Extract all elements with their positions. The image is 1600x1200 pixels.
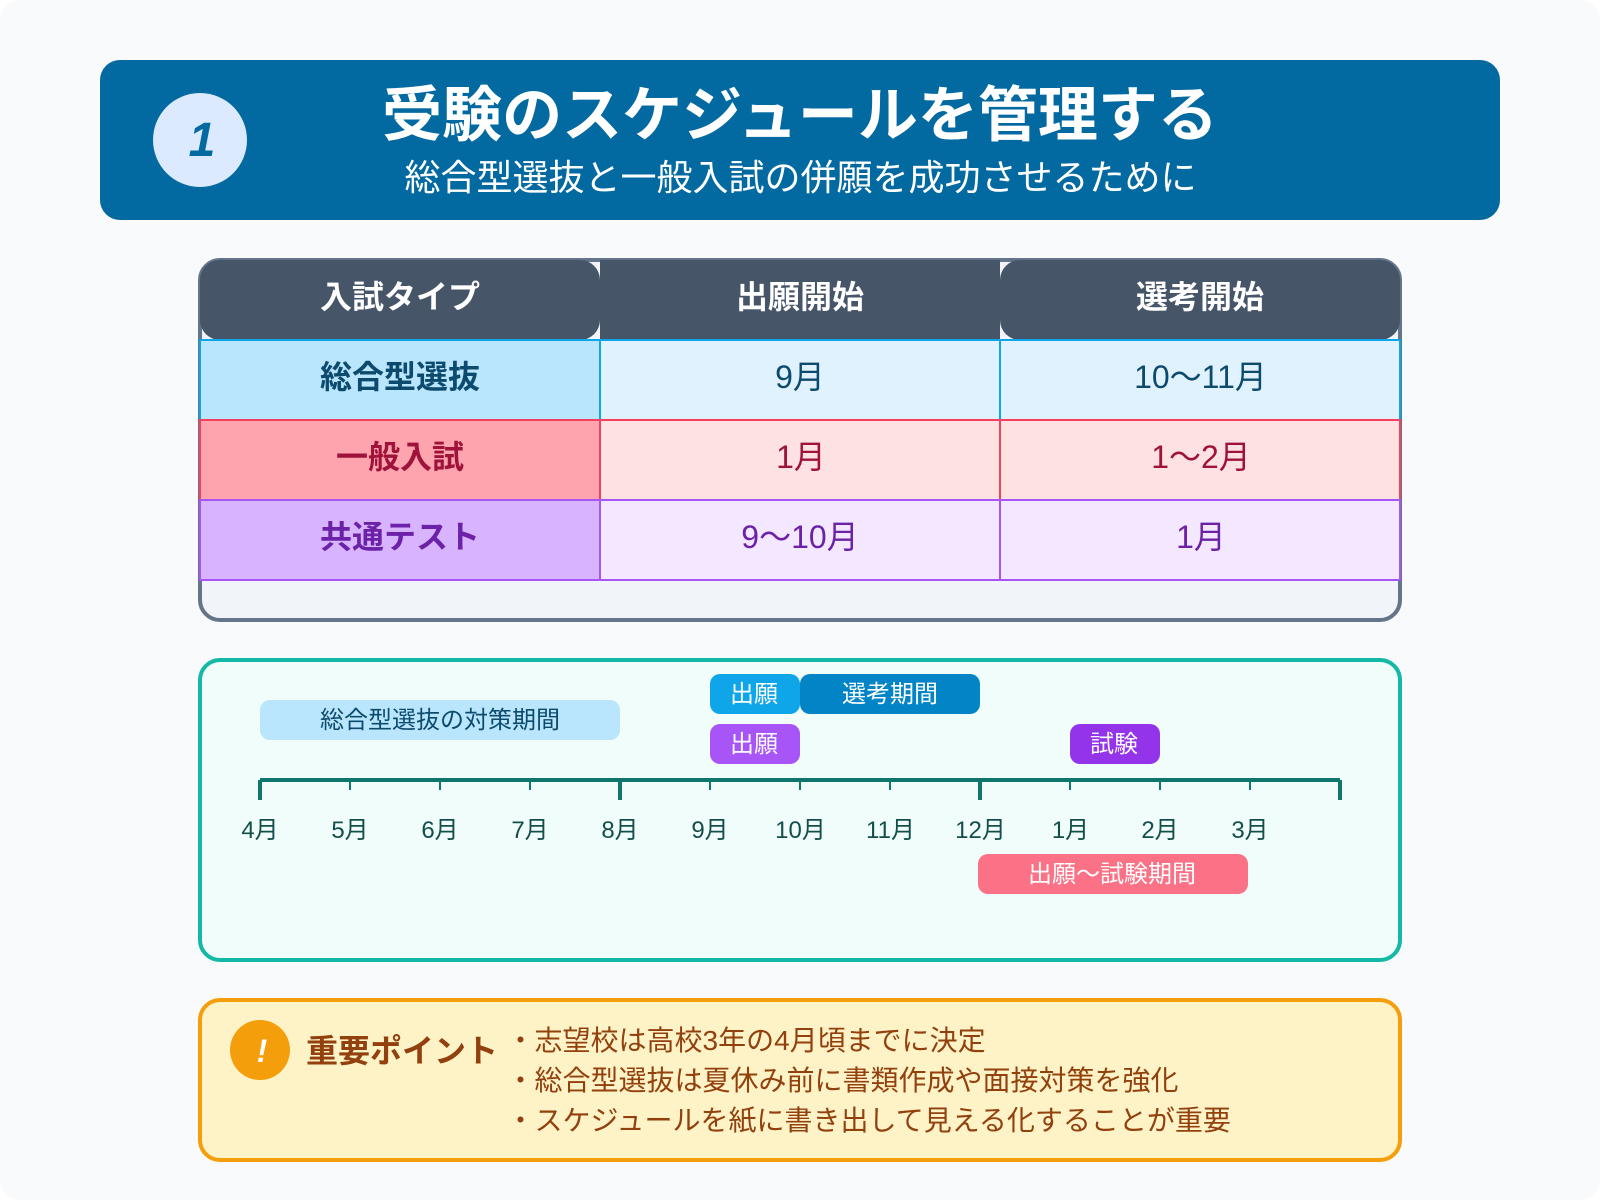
table row: 共通テスト [200,500,1400,580]
month labels: 5月 [331,817,369,844]
icon: exclamation [230,1020,290,1080]
table row: 共通テスト: 9〜10月 [741,519,859,555]
bar: 出願〜試験期間 [978,854,1248,894]
month labels: 4月 [241,817,279,844]
month labels: 1月 [1052,817,1089,844]
month labels: 2月 [1141,817,1179,844]
bar: 総合型選抜の対策期間 [260,700,620,740]
key points frame [200,1000,1400,1160]
month labels: 12月 [955,817,1006,844]
panel: key points [200,1000,1400,1160]
bar: 共通テスト 出願: 出願 [730,731,778,758]
timeline axis [260,780,1340,800]
month labels: 3月 [1231,817,1269,844]
bar: 出願〜試験期間: 出願〜試験期間 [1028,861,1196,888]
subtitle: 総合型選抜と一般入試の併願を成功させるために [404,157,1197,198]
bar: 共通テスト 出願 [710,724,800,764]
header banner [100,60,1500,220]
key points list: ・スケジュールを紙に書き出して見える化することが重要 [506,1105,1231,1136]
table row: 一般入試: 1月 [776,439,826,475]
bar: 総合型 出願 [710,674,800,714]
table row: 共通テスト: 共通テスト [320,519,480,555]
timeline frame [200,660,1400,960]
month labels: 8月 [601,817,639,844]
panel: schedule table [200,260,1400,620]
panel: timeline [200,660,1400,960]
bar: 選考期間: 選考期間 [842,681,938,708]
table row: 総合型選抜: 10〜11月 [1134,359,1267,395]
month labels: 10月 [775,817,826,844]
table header row: 選考開始 [1136,279,1264,315]
month labels: 6月 [421,817,459,844]
month labels [241,817,1269,844]
month labels: 7月 [511,817,549,844]
key points list [506,1025,1231,1136]
key points list: ・総合型選抜は夏休み前に書類作成や面接対策を強化 [506,1065,1179,1096]
banner background [100,60,1500,220]
bar: 試験: 試験 [1090,731,1138,758]
icon: number badge [153,93,247,187]
table header row: 入試タイプ [320,279,480,315]
table row: 一般入試: 一般入試 [336,439,464,475]
table header row: 出願開始 [736,279,864,315]
key points heading: 重要ポイント [306,1033,498,1069]
bar: 試験 [1070,724,1160,764]
table frame [200,260,1400,620]
icon: number badge: 1 [189,114,215,167]
bar: 総合型 出願: 出願 [730,681,778,708]
table header row [200,260,1400,340]
month labels: 11月 [866,817,915,844]
table row: 総合型選抜 [200,340,1400,420]
table row: 共通テスト: 1月 [1176,519,1226,555]
table row: 一般入試 [200,420,1400,500]
key points list: ・志望校は高校3年の4月頃までに決定 [506,1025,986,1056]
table row: 一般入試: 1〜2月 [1151,439,1251,475]
table row: 総合型選抜: 9月 [775,359,825,395]
bar: 選考期間 [800,674,980,714]
month labels: 9月 [691,817,729,844]
icon: exclamation: ! [257,1033,268,1069]
table row: 総合型選抜: 総合型選抜 [320,359,480,395]
bar: 総合型選抜の対策期間: 総合型選抜の対策期間 [320,707,560,734]
title: 受験のスケジュールを管理する [382,82,1218,149]
